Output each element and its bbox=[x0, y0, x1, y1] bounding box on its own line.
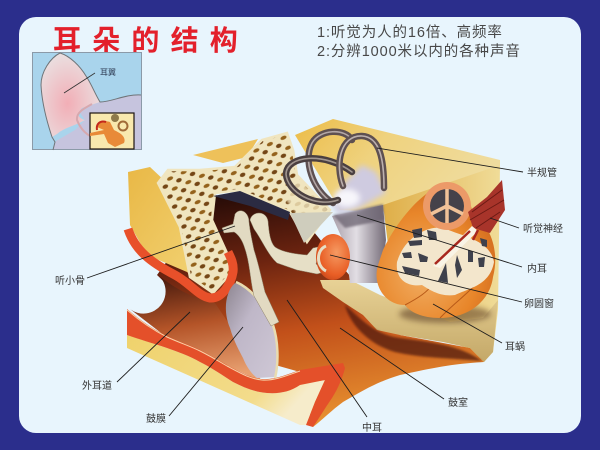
vestibule white blur bbox=[334, 189, 360, 207]
lower wall highlight bbox=[127, 310, 300, 380]
labels: 鼓室 bbox=[448, 396, 468, 409]
tympanic cavity bbox=[157, 195, 484, 427]
lower wall red layer bbox=[127, 309, 345, 427]
text block: hearing facts bbox=[317, 24, 521, 60]
labels: 外耳道 bbox=[82, 379, 112, 392]
labels: 耳蜗 bbox=[505, 341, 525, 353]
upper left yellow block bbox=[128, 167, 213, 293]
semicircular canals bbox=[286, 132, 384, 203]
cream shelf under cochlea bbox=[320, 280, 498, 362]
ossicles: incus and stapes bbox=[250, 213, 332, 274]
cavity ceiling shadow bbox=[213, 191, 290, 220]
cochlea spiral cross-section bbox=[397, 227, 494, 295]
vestibule upper glow bbox=[332, 165, 386, 214]
labels: 鼓膜 bbox=[146, 412, 166, 425]
yellow wall behind cochlea bbox=[383, 165, 500, 362]
bone cut face bbox=[290, 212, 333, 243]
labels: 内耳 bbox=[527, 262, 547, 275]
labels: 卵圆窗 bbox=[524, 297, 554, 310]
lower wall yellow layer bbox=[127, 335, 325, 425]
ear canal bbox=[130, 274, 262, 382]
inset: outer ear location diagram bbox=[32, 52, 142, 150]
dark shadow under shelf bbox=[345, 305, 482, 361]
labels: 听小骨 bbox=[55, 275, 85, 287]
spongy bone bbox=[158, 133, 330, 293]
yellow wedge bbox=[193, 139, 258, 163]
bone pale lower-right area bbox=[286, 176, 330, 225]
top coil ring bbox=[423, 182, 471, 230]
stapes ring bbox=[318, 246, 326, 271]
vestibule bbox=[332, 205, 386, 283]
illustration: ear cross-section bbox=[127, 119, 505, 427]
upper red band bbox=[128, 229, 233, 298]
ossicles: malleus bbox=[222, 211, 279, 326]
title: 耳朵的结构 bbox=[53, 25, 249, 56]
cochlea chambers bbox=[402, 228, 487, 283]
text block: hearing facts: 2:分辨1000米以内的各种声音 bbox=[317, 42, 521, 60]
back yellow bone block bbox=[295, 119, 500, 212]
inset: outer ear location diagram: 耳翼 bbox=[100, 68, 116, 77]
vestibule dark upper band bbox=[333, 204, 384, 228]
auditory nerve bbox=[433, 180, 505, 268]
shadow around cochlea bbox=[399, 305, 491, 323]
text block: hearing facts: 1:听觉为人的16倍、高频率 bbox=[317, 24, 503, 41]
labels: 听觉神经 bbox=[523, 222, 563, 235]
leader lines bbox=[87, 148, 523, 417]
labels: 半规管 bbox=[527, 166, 557, 179]
labels: 中耳 bbox=[362, 421, 382, 434]
labels bbox=[55, 166, 563, 434]
eardrum bbox=[226, 282, 278, 378]
oval window bbox=[316, 234, 350, 280]
cochlea bbox=[377, 182, 495, 318]
inset: middle ear thumbnail bbox=[90, 113, 134, 149]
